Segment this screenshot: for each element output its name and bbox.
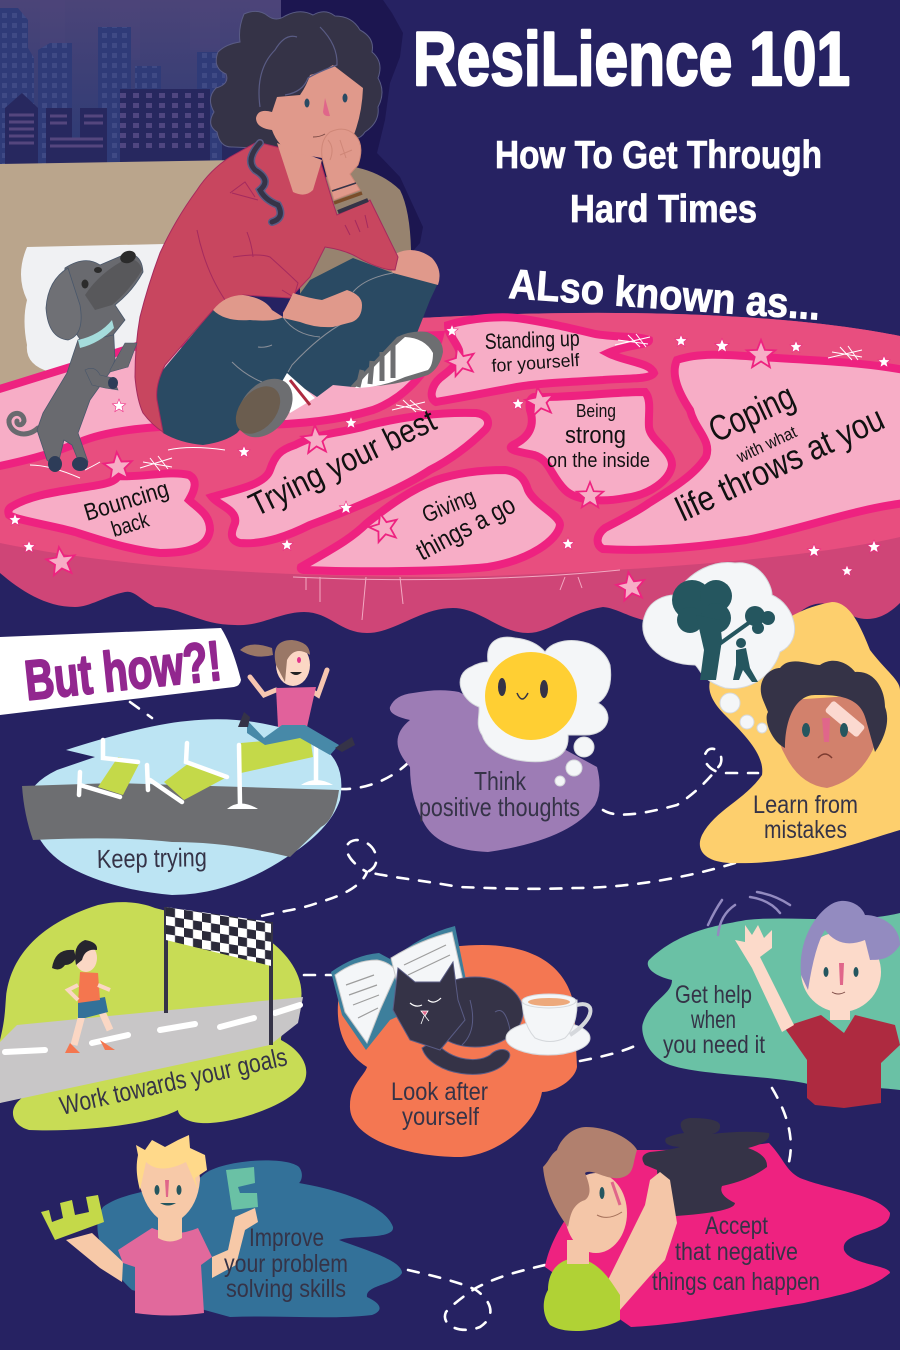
teacup xyxy=(506,994,590,1055)
text: standing up for yourself: Standing up xyxy=(484,326,580,354)
learn label: mistakes xyxy=(764,816,847,844)
track xyxy=(22,783,339,857)
dog: body xyxy=(37,320,115,468)
look after label: Look after xyxy=(391,1078,488,1106)
dog: ear xyxy=(46,268,81,340)
stars on blanket xyxy=(9,324,890,601)
girl: right shoe xyxy=(350,332,443,388)
panel: work towards your goals xyxy=(0,902,306,1130)
think label: positive thoughts xyxy=(419,792,580,822)
text: standing up for yourself: for yourself xyxy=(491,350,581,376)
girl: arm resting on knee xyxy=(283,290,362,327)
girl: knee skin xyxy=(213,295,283,321)
look after label: yourself xyxy=(402,1103,479,1131)
girl sitting xyxy=(135,11,443,448)
text: giving things a go: Giving xyxy=(418,483,479,528)
text: giving things a go: things a go xyxy=(411,489,520,566)
text: bouncing back xyxy=(81,475,172,542)
get help label: you need it xyxy=(663,1031,765,1059)
learn label xyxy=(753,791,858,844)
patch: standing up for yourself xyxy=(432,317,654,402)
boy with letters xyxy=(66,1135,258,1316)
text: coping with what life throws at you: with what xyxy=(733,422,800,467)
also known as: ALso known as... xyxy=(507,260,822,329)
girl: hair back xyxy=(210,11,382,150)
pillow xyxy=(21,244,165,372)
dog: snout shade xyxy=(85,258,142,310)
dog: tail xyxy=(9,413,38,434)
patch: bouncing back xyxy=(8,473,210,553)
text: being strong on the inside: strong xyxy=(565,422,626,449)
road xyxy=(0,997,303,1103)
runner jumping xyxy=(238,640,355,755)
girl: hair swirls xyxy=(259,27,337,107)
subtitle: How To Get Through xyxy=(495,134,822,177)
patch: trying your best xyxy=(212,401,488,543)
dark cloud xyxy=(642,1118,769,1217)
thought cloud with tree xyxy=(643,562,795,688)
panel: look after yourself xyxy=(331,926,590,1157)
improve label xyxy=(224,1224,348,1303)
dog: head xyxy=(60,253,143,342)
girl: jeans xyxy=(153,258,438,445)
dog: raised paw xyxy=(85,343,137,390)
yolk smiley xyxy=(485,652,577,740)
girl: right knee skin xyxy=(390,250,440,285)
panel: learn from mistakes xyxy=(643,562,900,863)
get help label: Get help xyxy=(675,981,752,1009)
text: bouncing back: back xyxy=(108,507,153,542)
improve label: solving skills xyxy=(226,1275,346,1303)
hurdles xyxy=(79,737,333,809)
subtitle xyxy=(495,134,822,231)
panel: keep trying xyxy=(22,640,355,895)
tree and hanging figure xyxy=(672,580,775,682)
dog: eyes xyxy=(82,267,102,288)
pink carpet xyxy=(0,313,900,633)
girl: sweater xyxy=(135,142,398,432)
girl: eyes and nose xyxy=(304,94,348,137)
subtitle: Hard Times xyxy=(570,188,757,231)
patch: giving things a go xyxy=(301,470,560,571)
panel: accept negative things xyxy=(543,1118,890,1331)
sleeping cat xyxy=(393,962,523,1074)
panel: get help xyxy=(642,892,900,1108)
text: being strong on the inside: on the inside xyxy=(547,450,650,472)
dog: collar xyxy=(78,320,114,348)
girl: hair lock xyxy=(251,143,280,222)
girl: fist lines xyxy=(328,140,352,160)
person looking up xyxy=(543,1127,677,1331)
dog: nose xyxy=(118,249,138,265)
finish flag xyxy=(166,907,271,1045)
accept label: that negative xyxy=(675,1238,798,1266)
panel: think positive thoughts xyxy=(390,637,611,852)
blanket patch under girl xyxy=(0,335,440,468)
accept label xyxy=(652,1212,820,1296)
patch: being strong on the inside xyxy=(511,392,672,500)
accept label: things can happen xyxy=(652,1268,820,1296)
girl: sweater folds xyxy=(197,182,368,313)
text: being strong on the inside xyxy=(547,401,650,472)
get help label: when xyxy=(690,1006,736,1034)
text: bouncing back: Bouncing xyxy=(81,475,172,527)
girl: jeans folds xyxy=(232,273,393,382)
work towards label: Work towards your goals xyxy=(57,1041,290,1121)
title xyxy=(413,17,850,231)
improve label: your problem xyxy=(224,1250,348,1278)
dog xyxy=(9,249,143,472)
text: trying your best: Trying your best xyxy=(243,401,442,523)
egg thought cloud xyxy=(460,637,611,762)
improve label: Improve xyxy=(249,1224,324,1252)
dashed path: connectors xyxy=(130,702,791,1330)
waving person xyxy=(735,901,900,1108)
city skyline window xyxy=(0,0,281,164)
thought bubbles xyxy=(555,737,594,786)
girl: left shoe xyxy=(226,368,304,448)
look after label xyxy=(391,1078,488,1131)
think label: Think xyxy=(474,766,527,796)
text: coping with what life throws at you: Coping xyxy=(702,375,801,450)
think label xyxy=(419,766,580,822)
runner xyxy=(52,940,115,1053)
learn label: Learn from xyxy=(753,791,858,819)
accept label: Accept xyxy=(705,1212,768,1240)
boy with bandage xyxy=(761,661,887,788)
letter: teal xyxy=(226,1167,258,1210)
girl: sock xyxy=(280,373,315,413)
but how text: But how?! xyxy=(22,629,224,712)
dog: paws xyxy=(48,377,118,472)
panel: problem solving xyxy=(41,1135,402,1317)
girl: bracelets xyxy=(332,183,368,212)
text: standing up for yourself xyxy=(484,326,581,376)
letter: green xyxy=(41,1195,104,1240)
blanket seam stitching xyxy=(293,570,620,620)
girl: forearm and fist under chin xyxy=(322,129,361,200)
small bubbles xyxy=(720,693,767,733)
text: being strong on the inside: Being xyxy=(576,401,616,421)
open book xyxy=(331,926,467,1050)
sofa xyxy=(0,160,417,400)
but how banner xyxy=(0,628,241,715)
girl: collar neck xyxy=(277,143,322,195)
girl: face xyxy=(256,65,363,158)
dark halo behind hair xyxy=(281,0,423,260)
patch: coping with what life throws at you xyxy=(598,355,900,550)
get help label xyxy=(663,981,765,1059)
wave marks xyxy=(708,892,790,935)
keep trying label: Keep trying xyxy=(97,842,207,874)
